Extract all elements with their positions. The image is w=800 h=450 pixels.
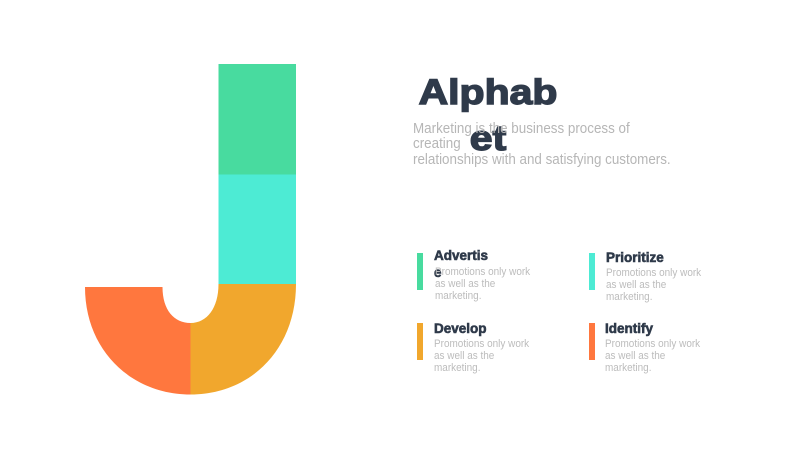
description: marketing. xyxy=(605,362,651,374)
accent bar green xyxy=(417,253,423,290)
intro text: creating xyxy=(413,136,461,152)
heading xyxy=(434,248,488,280)
description: marketing. xyxy=(435,290,481,302)
title: Alphab xyxy=(419,73,557,112)
item: Identify xyxy=(589,321,700,374)
item: Prioritize xyxy=(589,250,701,303)
description: as well as the xyxy=(434,350,494,362)
J segment: amber right curve xyxy=(190,284,296,394)
heading: e xyxy=(434,265,442,280)
J segment: teal middle xyxy=(218,174,296,284)
heading: Develop xyxy=(434,321,487,336)
description: Promotions only work xyxy=(435,266,530,278)
description: marketing. xyxy=(434,362,480,374)
description xyxy=(605,338,700,374)
description: as well as the xyxy=(435,278,495,290)
heading: Prioritize xyxy=(606,250,664,265)
intro text: relationships with and satisfying customers. xyxy=(413,152,671,168)
description: marketing. xyxy=(606,291,652,303)
description: as well as the xyxy=(606,279,666,291)
heading: Advertis xyxy=(434,248,488,263)
item: Develop xyxy=(417,321,529,374)
J segment: orange left curve xyxy=(85,287,190,394)
description xyxy=(435,266,530,302)
accent bar teal xyxy=(589,253,595,290)
J segment: green top xyxy=(218,64,296,174)
description: as well as the xyxy=(605,350,665,362)
accent bar orange xyxy=(589,323,595,360)
intro text xyxy=(413,120,671,168)
heading: Identify xyxy=(605,321,653,336)
description: Promotions only work xyxy=(434,338,529,350)
description: Promotions only work xyxy=(605,338,700,350)
description xyxy=(606,267,701,303)
title: et xyxy=(470,119,506,158)
title xyxy=(418,73,557,158)
description: Promotions only work xyxy=(606,267,701,279)
accent bar amber xyxy=(417,323,423,360)
item: Advertise xyxy=(417,248,530,302)
description xyxy=(434,338,529,374)
intro text: Marketing is the business process of xyxy=(413,120,630,136)
